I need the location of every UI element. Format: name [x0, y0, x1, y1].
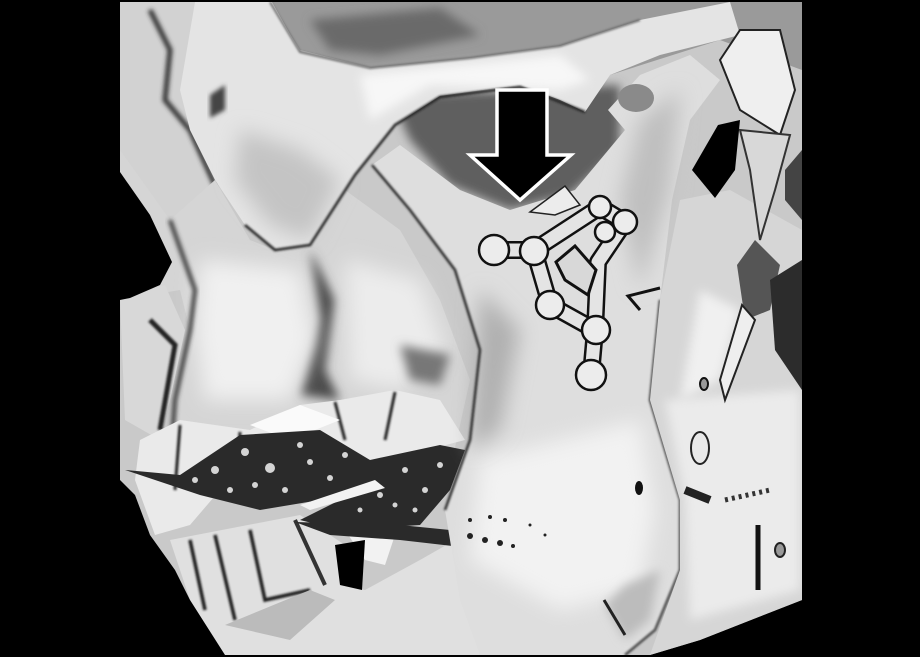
mandible ramus and body — [372, 55, 720, 655]
upper-left facial bone with shadow streak — [120, 2, 215, 240]
arrow pointing to fracture site — [470, 90, 571, 200]
black background areas — [120, 172, 802, 655]
perforation dots along the mandible — [467, 515, 546, 548]
contralateral mandible — [650, 190, 802, 655]
upper teeth — [135, 390, 465, 535]
background bone tone — [120, 2, 802, 655]
orbit and deep structures behind the arch — [270, 2, 802, 210]
figure: 3D CT reconstruction of jaw — [120, 2, 802, 655]
metal artifact bands — [125, 430, 465, 546]
dark hole behind the ramus — [692, 120, 740, 198]
fixation plate — [479, 186, 637, 390]
cheekbone and orbital rim — [180, 2, 740, 250]
skull base structures at upper right — [720, 30, 802, 400]
lower teeth and anterior mandible — [170, 515, 480, 655]
maxilla — [120, 150, 470, 500]
